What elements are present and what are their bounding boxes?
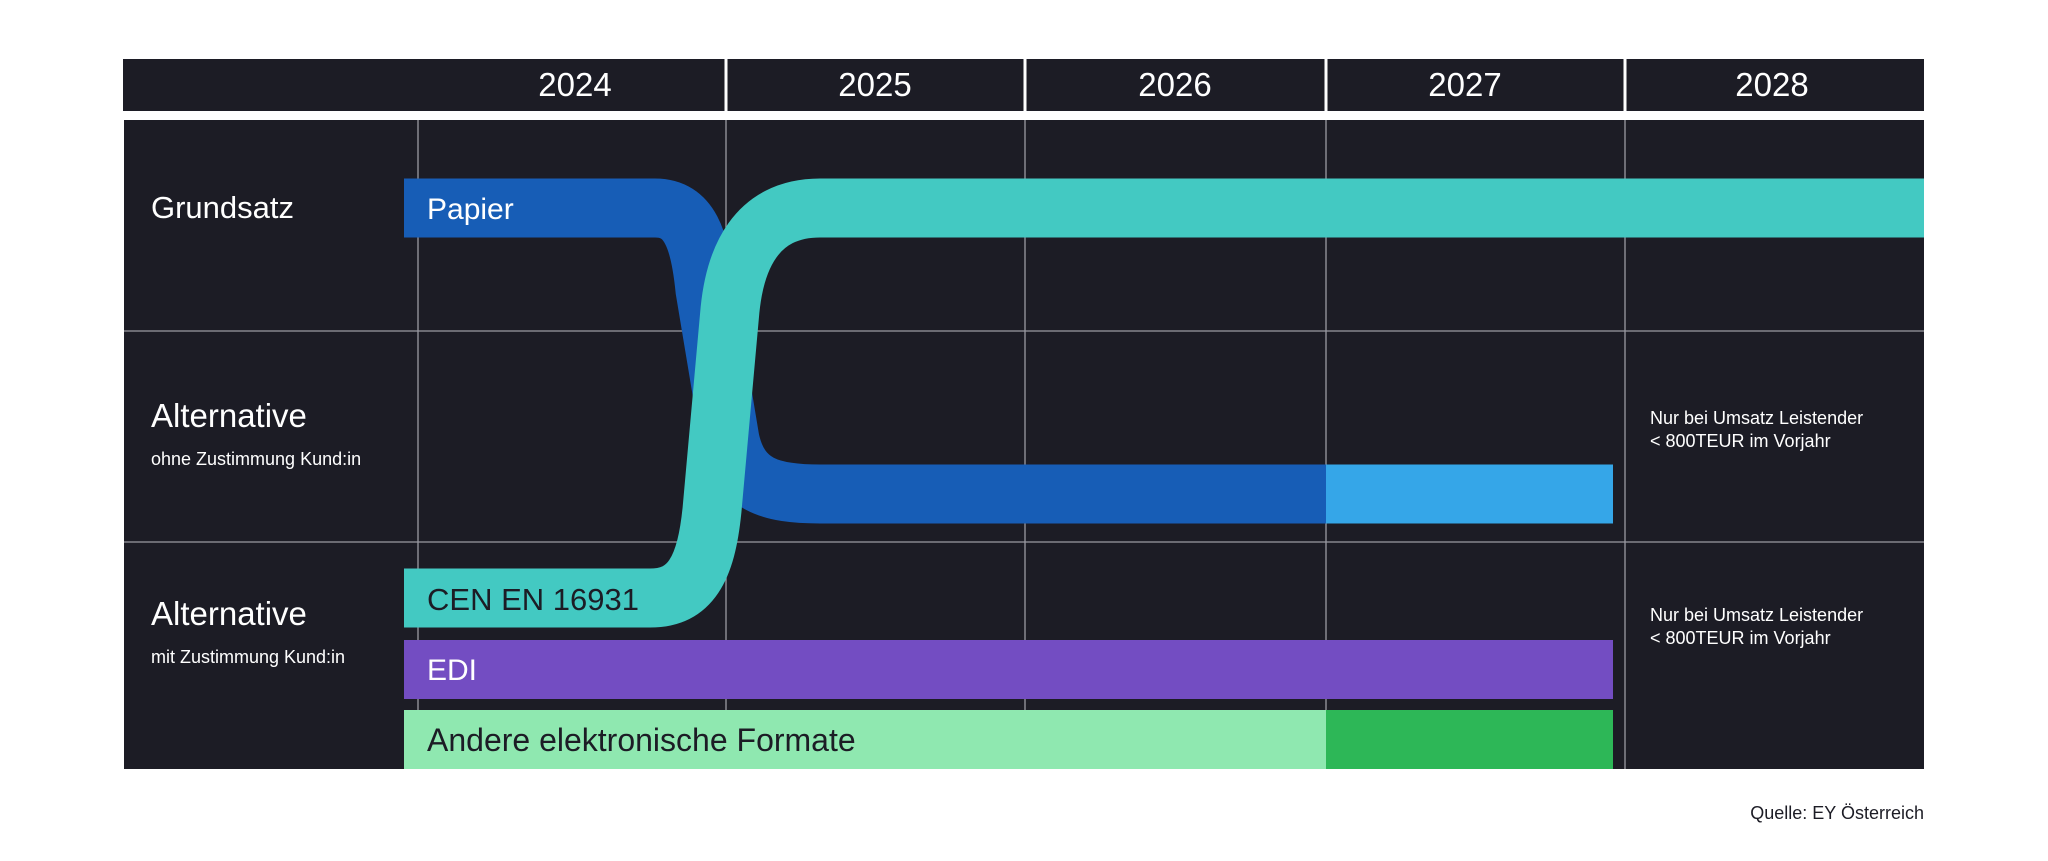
bar: Papier flow: Papier — [427, 193, 514, 226]
note: row 3: Nur bei Umsatz Leistender — [1650, 605, 1863, 625]
note: row 3: < 800TEUR im Vorjahr — [1650, 628, 1831, 648]
bar: EDI: EDI — [427, 654, 477, 687]
row labels: ohne Zustimmung Kund:in — [151, 449, 361, 469]
source: Quelle: EY Österreich — [1750, 803, 1924, 823]
header bar: 2027 — [1428, 66, 1502, 103]
row labels: mit Zustimmung Kund:in — [151, 647, 345, 667]
bar: CEN EN 16931 flow: CEN EN 16931 — [427, 582, 639, 617]
header bar: 2025 — [838, 66, 912, 103]
note: row 2 — [1650, 408, 1863, 451]
note: row 3 — [1650, 605, 1863, 648]
bar: Andere elektronische Formate: Andere elektronische Formate — [427, 722, 856, 758]
header bar: 2024 — [538, 66, 612, 103]
body grid — [124, 120, 1924, 769]
header bar: 2028 — [1735, 66, 1809, 103]
row labels — [151, 190, 361, 667]
row labels: Grundsatz — [151, 190, 294, 225]
row labels: Alternative — [151, 397, 307, 434]
note: row 2: Nur bei Umsatz Leistender — [1650, 408, 1863, 428]
note: row 2: < 800TEUR im Vorjahr — [1650, 431, 1831, 451]
header bar — [123, 59, 1924, 111]
bar: Papier flow — [404, 193, 1613, 524]
row labels: Alternative — [151, 595, 307, 632]
bar: EDI — [404, 640, 1613, 699]
bar: Andere elektronische Formate — [404, 710, 1613, 769]
header bar: 2026 — [1138, 66, 1212, 103]
